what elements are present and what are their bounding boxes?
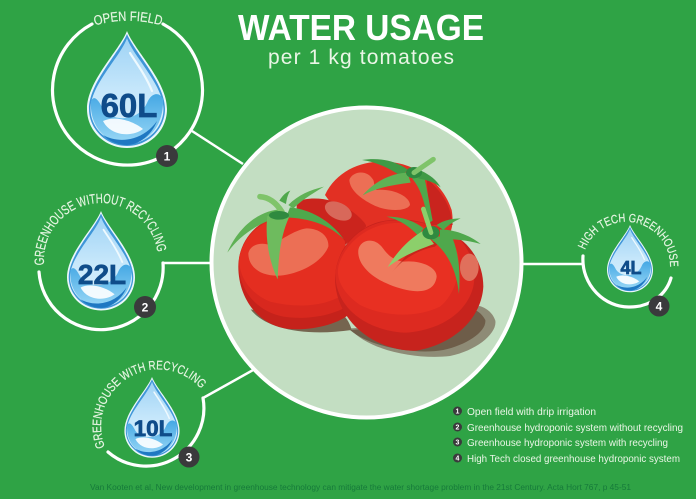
citation: Van Kooten et al, New development in greenhouse technology can mitigate the water shortage problem in the 21st Century. Acta Hort 767, p 45-51	[90, 483, 632, 492]
value: 22L	[78, 259, 126, 290]
title: WATER USAGE	[238, 7, 484, 48]
value: 10L	[134, 416, 173, 441]
curved label: GREENHOUSE WITHOUT RECYCLING	[34, 194, 166, 265]
badge 1: 1	[164, 150, 171, 164]
badge 4: 4	[656, 300, 663, 314]
legend item 3: 3	[456, 440, 460, 446]
legend item 2: 2	[456, 424, 460, 432]
ring	[583, 256, 671, 307]
panel: greenhouse with recycling	[92, 360, 206, 468]
panel: open field	[50, 11, 204, 167]
ring	[52, 24, 203, 165]
title: per 1 kg tomatoes	[268, 46, 454, 69]
badge 2: 2	[142, 300, 149, 314]
badge 1	[156, 145, 178, 167]
value: 4L	[620, 258, 642, 278]
panel: high tech greenhouse	[578, 213, 678, 316]
water drop	[87, 31, 167, 148]
curved label: OPEN FIELD	[94, 11, 162, 25]
legend item 3: Greenhouse hydroponic system with recycling	[467, 438, 668, 449]
legend item 1: Open field with drip irrigation	[467, 407, 596, 418]
badge 3: 3	[186, 450, 193, 464]
ring	[108, 398, 204, 466]
ring	[39, 263, 163, 330]
title	[238, 7, 484, 69]
legend item 4: High Tech closed greenhouse hydroponic system	[467, 454, 680, 465]
panel: greenhouse without recycling	[34, 194, 166, 332]
illustration: tomatoes	[227, 159, 495, 357]
panel: central tomato circle	[212, 108, 522, 418]
legend item 2: Greenhouse hydroponic system without recycling	[467, 423, 683, 434]
curved label: HIGH TECH GREENHOUSE	[578, 213, 678, 267]
legend	[453, 406, 683, 465]
water drop	[67, 211, 135, 310]
legend item 4: 4	[456, 456, 460, 462]
water drop	[607, 225, 653, 292]
curved label: GREENHOUSE WITH RECYCLING	[92, 360, 206, 448]
value: 60L	[101, 87, 157, 124]
water drop	[124, 377, 180, 458]
connector lines	[163, 131, 583, 398]
legend item 1: 1	[456, 408, 460, 416]
